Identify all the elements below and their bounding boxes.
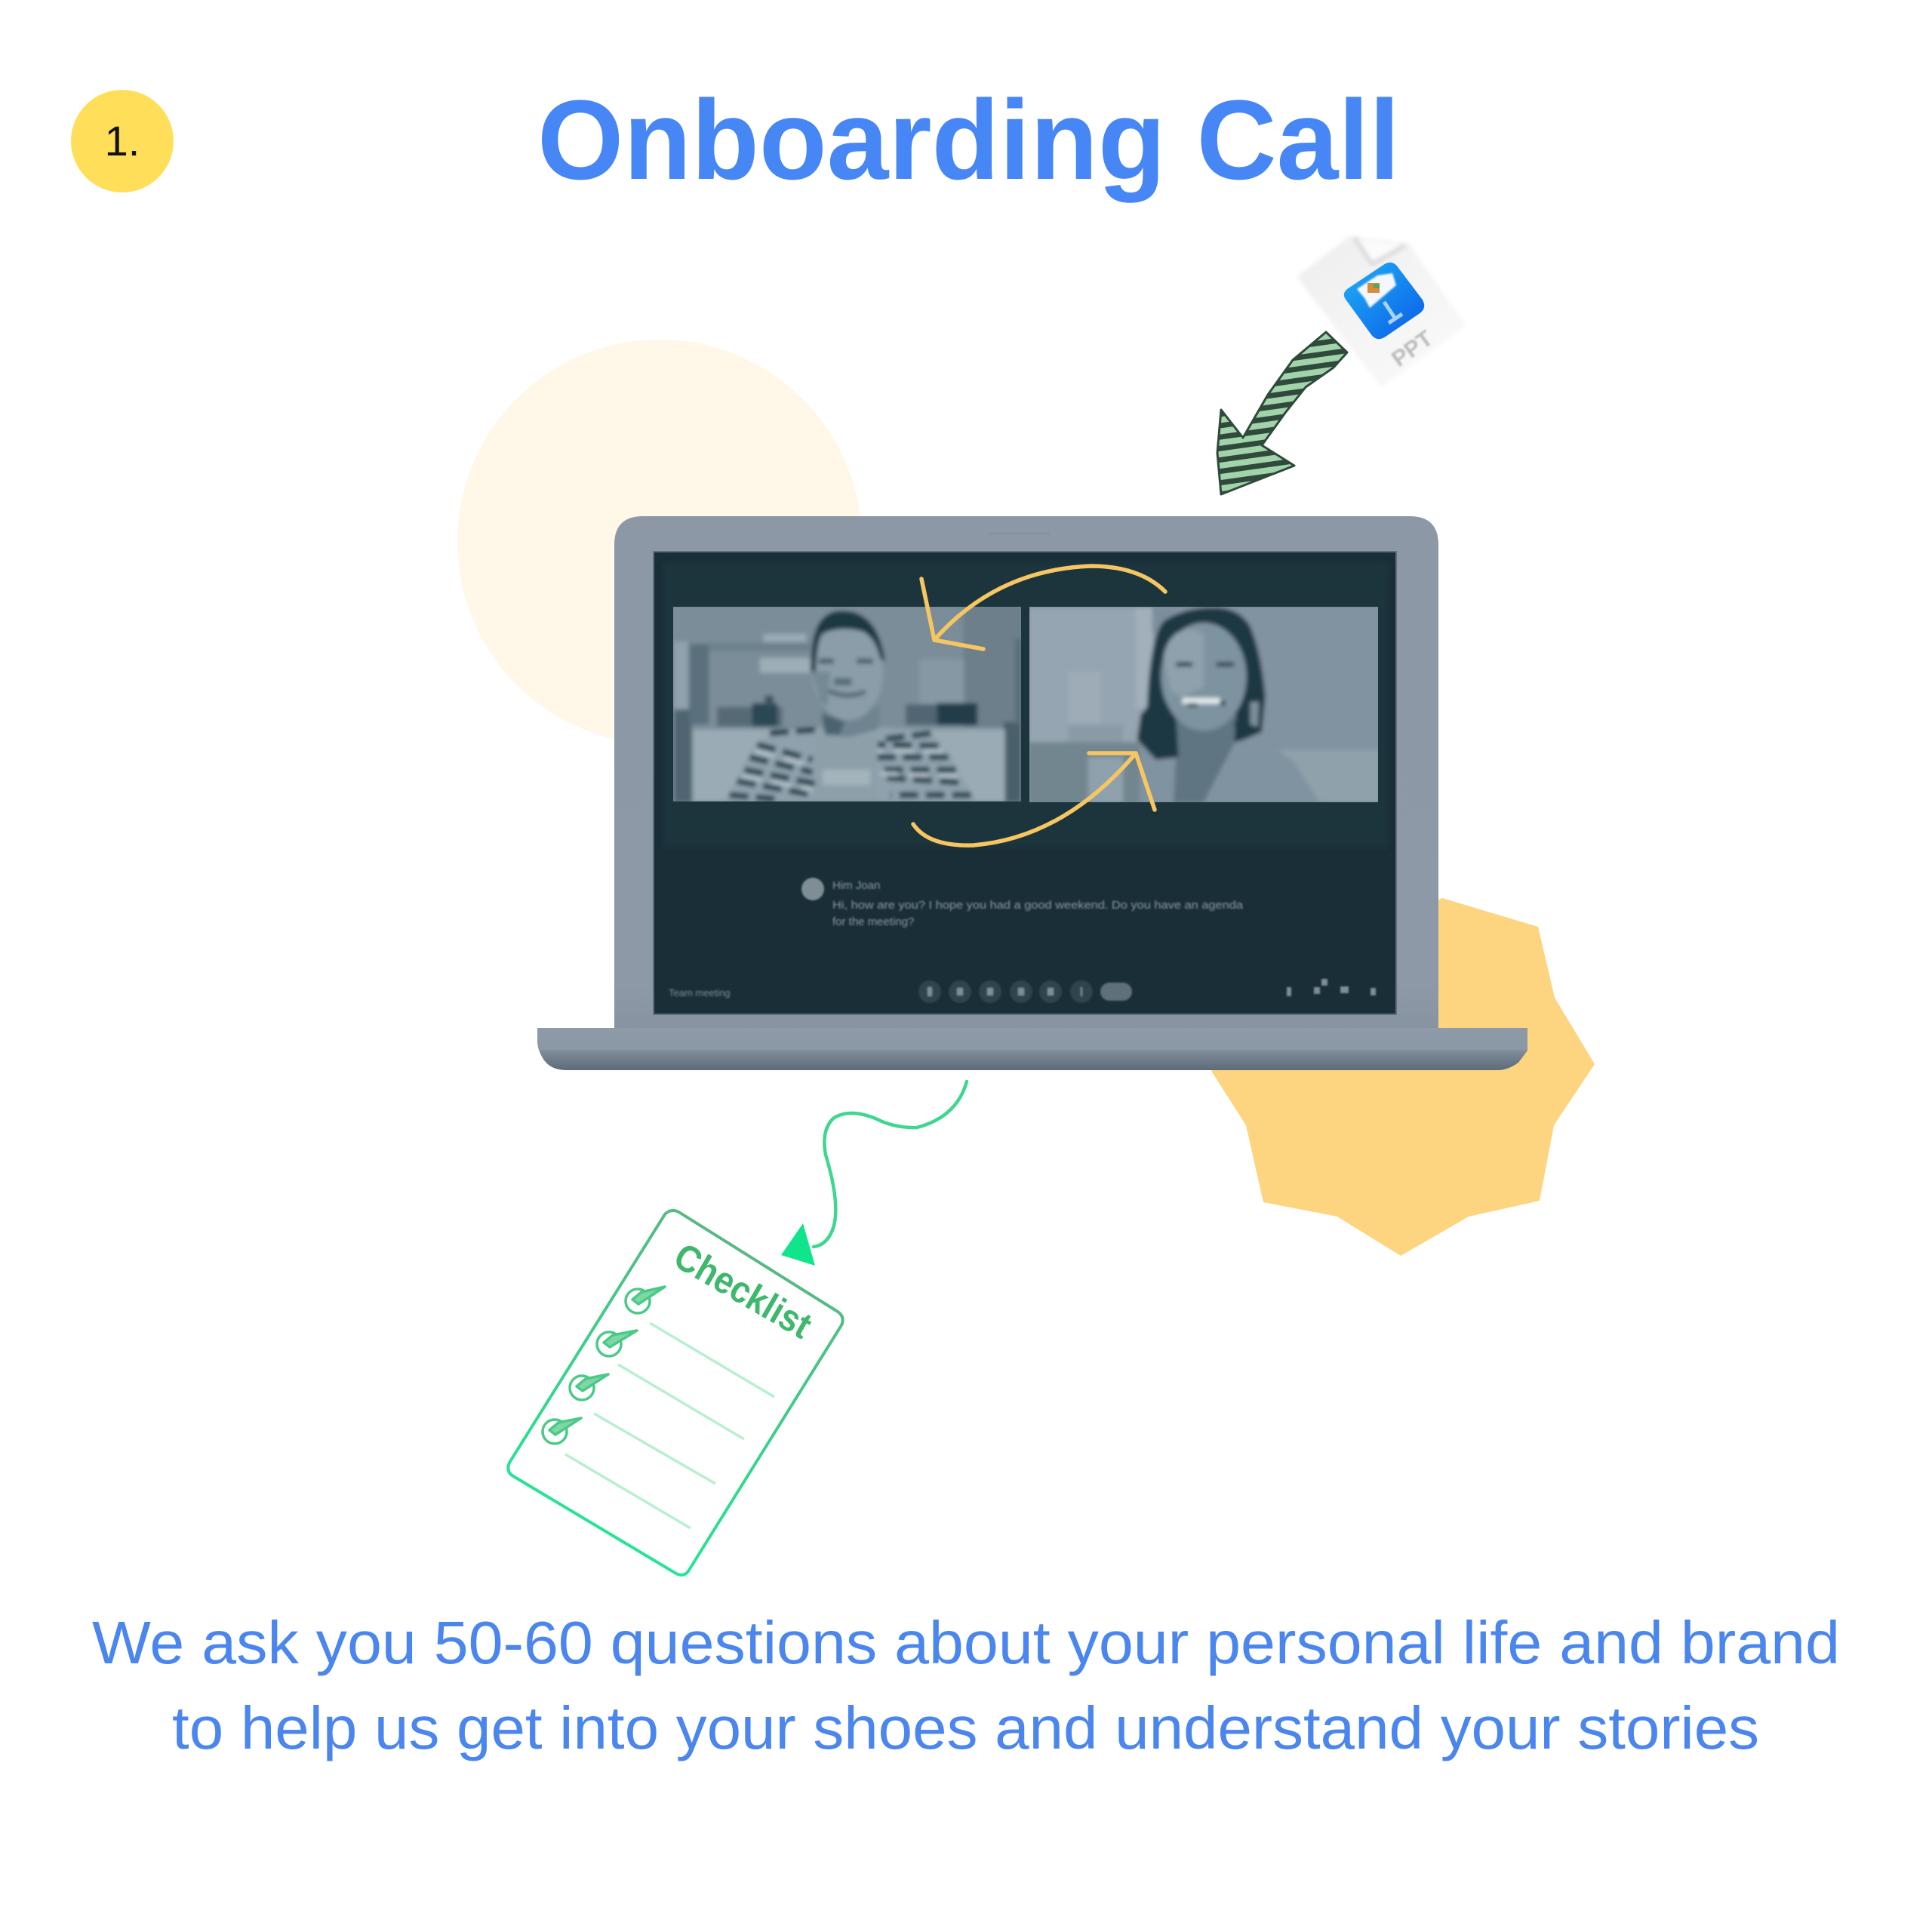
hair wisps (1149, 697, 1176, 760)
chat message (801, 878, 1244, 928)
video tile: woman (1025, 604, 1383, 805)
app icon (1344, 263, 1424, 339)
number badge: 1. (105, 117, 140, 165)
neck (821, 707, 881, 737)
laptop camera notch (989, 533, 1050, 534)
background orange star (1211, 898, 1595, 1256)
keynote file icon (1297, 236, 1466, 387)
body (1274, 750, 1317, 802)
eyes and smile (1176, 662, 1192, 666)
checklist heading: Checklist (667, 1235, 819, 1347)
file page (1297, 236, 1466, 387)
hair (811, 611, 885, 672)
PPT label: PPT (1387, 326, 1438, 372)
checklist lines (565, 1323, 774, 1528)
swap arrow top (921, 566, 1165, 649)
checklist ticks (543, 1287, 665, 1444)
meeting toolbar (669, 979, 1376, 1003)
shirt (724, 727, 976, 801)
laptop (537, 516, 1527, 1070)
title: Onboarding Call (537, 76, 1400, 203)
video tile: man (669, 604, 1026, 805)
laptop lid (614, 516, 1438, 1038)
laptop screen (654, 552, 1396, 1014)
chat message: for the meeting? (832, 915, 914, 928)
chat message: Him Joan (832, 879, 880, 892)
description text: to help us get into your shoes and understand your stories (172, 1694, 1759, 1761)
laptop base (537, 1028, 1527, 1070)
eyes, nose, mouth (819, 659, 834, 663)
neck and face (1176, 715, 1236, 762)
checklist arrow (781, 1081, 967, 1266)
meeting toolbar: Team meeting (669, 987, 731, 998)
face (813, 623, 883, 721)
hair (1137, 608, 1266, 760)
checklist card (508, 1211, 843, 1575)
description text: We ask you 50-60 questions about your personal life and brand (92, 1609, 1840, 1676)
description text (92, 1609, 1840, 1761)
swap arrow bottom (913, 753, 1155, 845)
page fold (1355, 238, 1405, 264)
background circle (457, 340, 862, 744)
number badge (71, 90, 174, 192)
chat message: Hi, how are you? I hope you had a good weekend. Do you have an agenda (832, 899, 1244, 912)
hand-drawn green arrow (1217, 332, 1347, 494)
